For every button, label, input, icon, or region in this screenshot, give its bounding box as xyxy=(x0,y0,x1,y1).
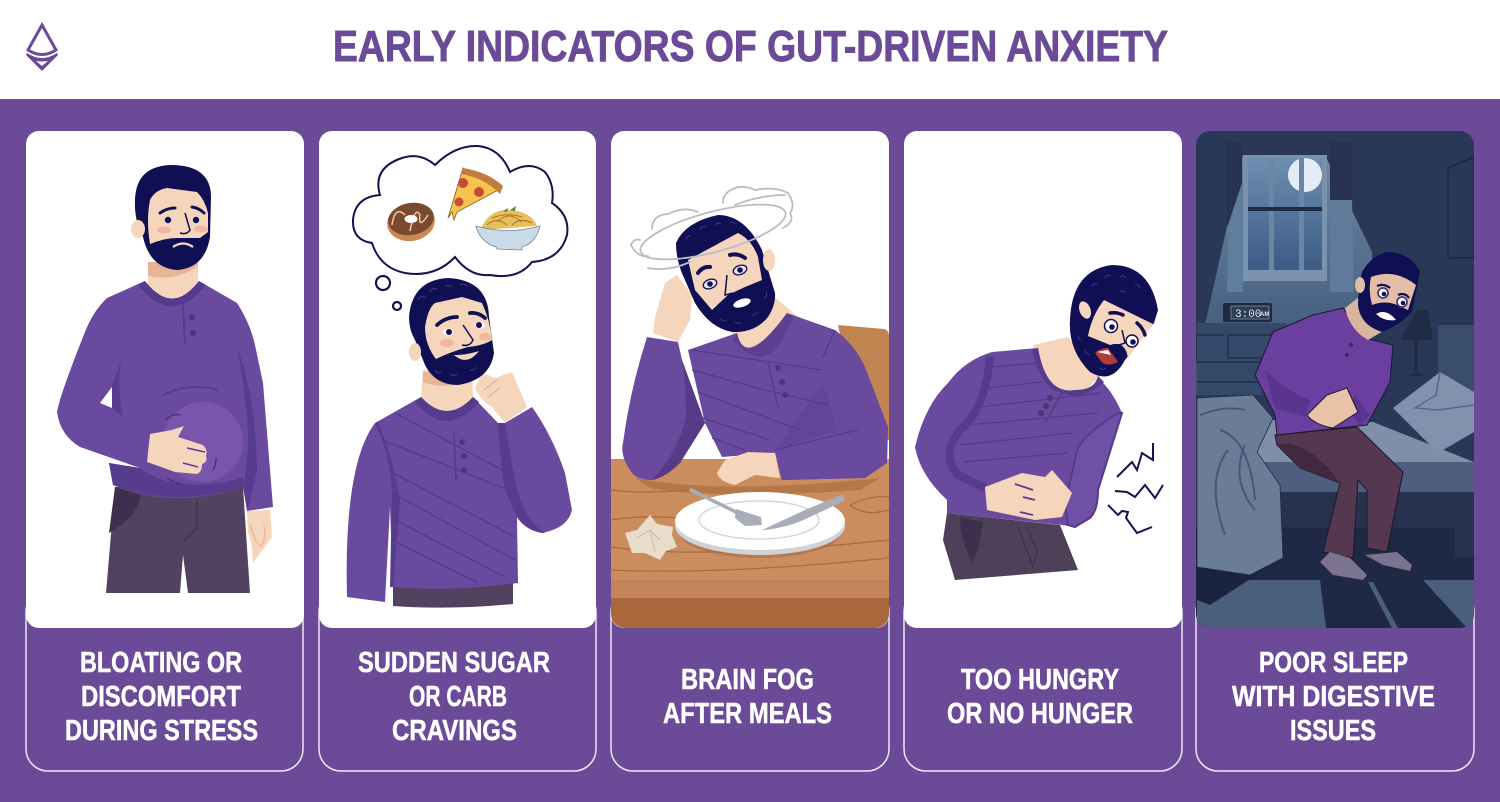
curtains xyxy=(1227,142,1242,225)
bedside clock: 3:00 xyxy=(1235,309,1261,321)
caption box outline xyxy=(1196,590,1474,771)
caption: SUDDEN SUGAR xyxy=(358,647,550,679)
head xyxy=(409,278,494,385)
trousers xyxy=(943,513,1078,580)
collar and placket xyxy=(138,281,206,306)
neck xyxy=(148,262,198,298)
caption box outline xyxy=(26,590,303,771)
caption: DURING STRESS xyxy=(65,715,258,747)
trousers xyxy=(106,487,250,593)
caption box outline xyxy=(319,590,596,771)
head xyxy=(676,215,775,332)
table xyxy=(611,459,889,628)
caption: ISSUES xyxy=(1290,715,1376,747)
panel: cravings xyxy=(319,131,596,771)
moonlight cone xyxy=(1196,155,1372,395)
picture frame xyxy=(1448,157,1474,258)
caption xyxy=(358,647,550,747)
illustration: man awake at night in bedroom xyxy=(1196,131,1474,628)
hand on chin xyxy=(475,372,527,423)
bedside clock: AM xyxy=(1260,312,1269,318)
caption: OR NO HUNGER xyxy=(947,698,1133,730)
head xyxy=(131,165,211,270)
header band xyxy=(0,0,1500,99)
bed xyxy=(1250,372,1474,528)
blanket xyxy=(1197,395,1283,575)
caption: BLOATING OR xyxy=(80,647,242,679)
dizzy swirl xyxy=(631,187,793,271)
slippers xyxy=(1320,552,1367,580)
illustration: man thinking of food xyxy=(347,278,572,608)
caption: TOO HUNGRY xyxy=(961,664,1119,696)
chair xyxy=(838,325,889,440)
caption box outline xyxy=(904,590,1182,771)
caption: CRAVINGS xyxy=(392,715,517,747)
pants xyxy=(1275,427,1403,558)
illustration card xyxy=(26,131,304,628)
stomach rumble lines xyxy=(1108,443,1163,533)
sweater xyxy=(57,281,273,511)
neck xyxy=(732,298,797,348)
trousers xyxy=(393,583,513,608)
thought bubble xyxy=(353,146,567,310)
caption xyxy=(65,647,258,747)
caption xyxy=(663,664,832,730)
illustration: bloated man xyxy=(57,165,273,593)
illustration card xyxy=(319,131,596,628)
title: EARLY INDICATORS OF GUT-DRIVEN ANXIETY xyxy=(333,22,1168,71)
hands xyxy=(1307,388,1358,428)
icon: donut xyxy=(384,199,438,245)
caption: DISCOMFORT xyxy=(81,681,241,713)
panel: hunger xyxy=(904,131,1182,771)
icon: pasta bowl xyxy=(476,206,540,250)
forearm xyxy=(1065,413,1122,527)
caption: BRAIN FOG xyxy=(681,664,814,696)
window xyxy=(1243,155,1327,281)
neck xyxy=(421,370,473,411)
plate xyxy=(675,492,845,558)
fork xyxy=(691,490,762,526)
right hand xyxy=(247,510,272,563)
caption xyxy=(947,664,1133,730)
panel: brain fog xyxy=(611,131,889,771)
sweater xyxy=(347,397,572,602)
illustration card xyxy=(611,131,889,628)
caption: WITH DIGESTIVE xyxy=(1232,681,1435,713)
illustration card xyxy=(904,131,1182,628)
head xyxy=(1345,252,1420,340)
caption box outline xyxy=(611,590,889,771)
floor xyxy=(1196,528,1474,628)
panel: poor sleep xyxy=(1196,131,1474,771)
sleeve left xyxy=(622,337,705,480)
hands xyxy=(985,470,1072,520)
head xyxy=(1070,265,1158,376)
hand on head xyxy=(653,275,692,342)
sweater xyxy=(915,348,1122,527)
icon: pizza xyxy=(448,168,503,220)
crumpled napkin xyxy=(625,515,677,560)
caption: OR CARB xyxy=(409,681,507,713)
icon: logo xyxy=(26,25,58,71)
panel: bloating xyxy=(26,131,304,771)
knife xyxy=(762,495,845,530)
sweater xyxy=(1255,308,1393,435)
caption: POOR SLEEP xyxy=(1259,647,1408,679)
caption xyxy=(1232,647,1435,747)
bedside clock xyxy=(1223,303,1272,322)
hand on table xyxy=(717,452,780,485)
caption: AFTER MEALS xyxy=(663,698,832,730)
torso xyxy=(688,313,888,480)
lamp xyxy=(1400,310,1433,376)
illustration: man with brain fog at table xyxy=(611,187,889,628)
belly xyxy=(163,402,243,482)
dresser xyxy=(1197,323,1287,386)
illustration: hungry man xyxy=(915,265,1163,580)
hand on belly xyxy=(147,426,207,474)
neck xyxy=(1033,337,1102,395)
